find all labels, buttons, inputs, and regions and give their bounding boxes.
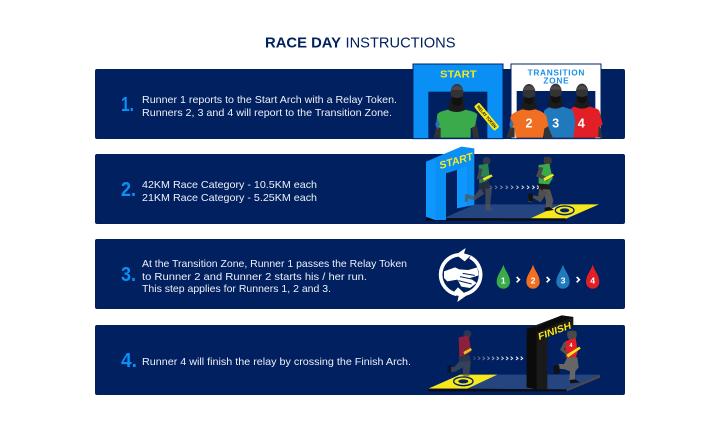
faded runner [465,157,493,210]
faded runner relay token [483,174,493,181]
step 3 text: At the Transition Zone, Runner 1 passes the Relay Token [142,259,407,270]
start arch: START [438,151,476,172]
illustration: start arch and transition zone [413,64,603,139]
floor [460,375,600,389]
start arch: START [440,70,477,81]
panel: step 4 [95,315,625,395]
relay token: RELAY TOKEN [476,104,498,129]
faded runner [447,330,471,377]
chevron [577,277,579,282]
runner 2: 2 [525,116,533,130]
transition zone board [511,64,601,139]
start arch [413,64,503,139]
yellow mat [428,375,497,389]
drop 4 [586,265,599,289]
step 1 text: Runners 2, 3 and 4 will report to the Transition Zone. [142,108,392,119]
step number 1: 1. [121,94,134,116]
progress chevrons [490,186,539,189]
runner 4 [569,84,603,138]
step number 2: 2. [121,179,136,201]
runner 4: 4 [578,116,585,130]
progress chevrons [473,357,523,360]
drop 2: 2 [531,276,536,286]
step 2 text: 42KM Race Category - 10.5KM each [142,180,317,191]
step 3 text: to Runner 2 and Runner 2 starts his / her run. [142,272,367,283]
illustration: finish arch and runner [527,315,581,389]
runner 3 [544,84,575,138]
panel: step 2 [95,147,625,224]
title: RACE DAY [265,34,341,52]
icon: handshake cycle [441,248,481,302]
transition zone board: ZONE [543,76,569,86]
step 3 text: This step applies for Runners 1, 2 and 3. [142,284,331,295]
runner [528,157,554,211]
title: INSTRUCTIONS [346,34,456,52]
step number 4: 4. [121,350,137,372]
runner 1 [433,84,500,138]
illustration: handover icon and drops [441,248,599,302]
illustration: start arch and runner [426,147,599,221]
transition zone board: TRANSITION [528,67,584,77]
finish arch: FINISH [537,320,574,343]
drop 3: 3 [561,276,566,286]
chevron [517,277,519,282]
step 2 text: 21KM Race Category - 5.25KM each [142,193,317,204]
drop 1 [497,265,510,289]
illustration: mat and approaching runner [428,330,600,391]
panel: step 1 [95,64,625,139]
start arch [426,147,476,220]
drop 4: 4 [590,276,595,286]
runner 2 [507,84,553,138]
drop 1: 1 [501,276,506,286]
step 1 text: Runner 1 reports to the Start Arch with a Relay Token. [142,95,397,106]
step 4 text: Runner 4 will finish the relay by crossing the Finish Arch. [142,357,411,368]
floor [443,204,598,219]
drop 3 [556,265,570,289]
runner 3: 3 [552,116,559,130]
yellow start mat [531,204,599,218]
step number 3: 3. [121,264,136,286]
panel: step 3 [95,239,625,309]
runner: 4 [570,343,573,349]
drop 2 [526,265,540,289]
faded runner relay token [463,348,472,355]
chevron [547,277,549,282]
